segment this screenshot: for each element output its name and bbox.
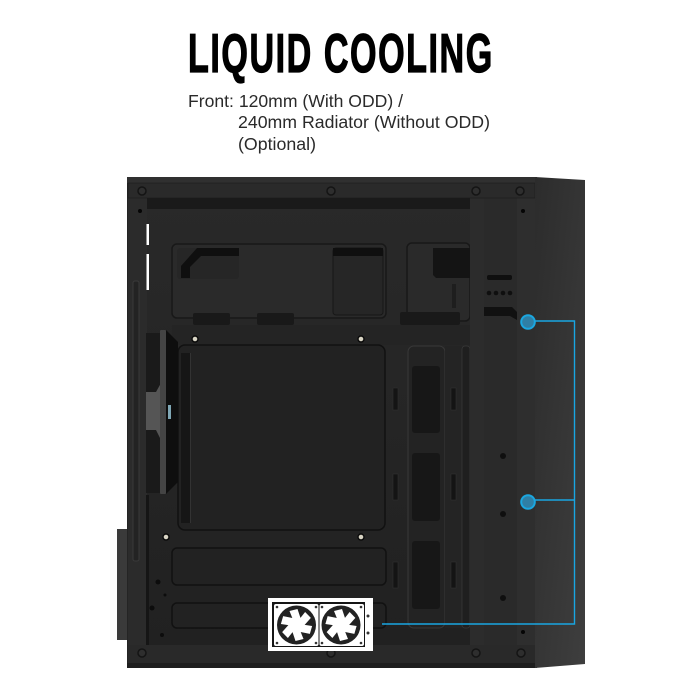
PCI bracket detail [150, 580, 166, 637]
small mounting slots [393, 388, 456, 588]
front panel [535, 177, 585, 668]
standoffs [163, 336, 364, 540]
text block: front radiator support [188, 91, 490, 154]
fan two [322, 606, 360, 644]
bottom rail [127, 645, 535, 668]
top rail [128, 183, 535, 198]
side fan [146, 330, 178, 494]
computer case [117, 177, 585, 668]
front centre rail [484, 198, 517, 645]
fan one [277, 606, 316, 644]
text block: front radiator support: 240mm Radiator (Without ODD) [238, 112, 490, 132]
motherboard tray [178, 345, 385, 530]
callout marker: lower radiator point [521, 495, 535, 509]
divider band [172, 325, 470, 345]
front pillar [470, 198, 484, 645]
left frame rail [127, 177, 535, 645]
radiator mounting dots [276, 606, 370, 644]
drive cage with mesh [408, 346, 470, 628]
interior back wall [147, 198, 472, 645]
callout connector lines [382, 321, 574, 624]
text block: front radiator support: (Optional) [238, 134, 316, 154]
text block: front radiator support: Front: 120mm (With ODD) / [188, 91, 403, 111]
radiator icon [268, 598, 373, 651]
rear expansion bracket [117, 529, 128, 640]
front right post [517, 198, 535, 645]
screws [138, 187, 525, 657]
lower expansion slots [172, 548, 386, 628]
cable tabs [193, 312, 460, 325]
top recess shadow [147, 198, 472, 209]
callout marker: upper radiator point [521, 315, 535, 329]
title: LIQUID COOLING [188, 23, 494, 84]
upper panel with cutouts [172, 243, 470, 321]
case body [127, 177, 537, 668]
